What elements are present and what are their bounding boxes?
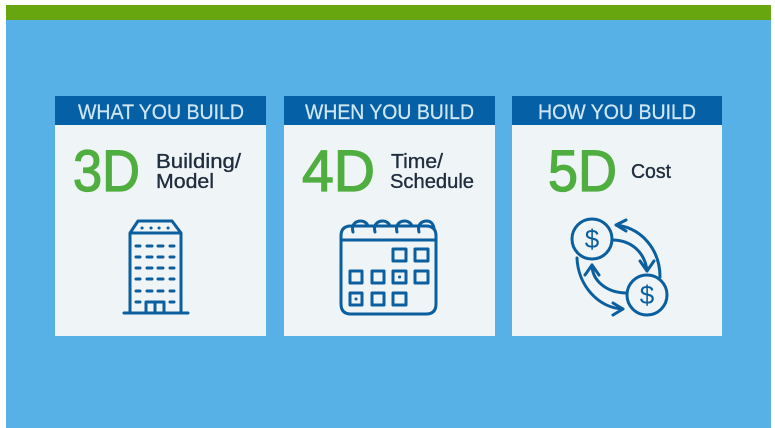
heading: 5D: 5D (548, 139, 617, 204)
label: Building/Model: Building/ (156, 151, 241, 173)
label: Building/Model: Model (156, 171, 214, 193)
icon: money cycle (572, 219, 667, 315)
header: how you build: HOW YOU BUILD (538, 101, 696, 124)
top green bar (6, 5, 771, 20)
header: what you build (55, 96, 266, 125)
header: when you build: WHEN YOU BUILD (305, 101, 474, 124)
panel: 5D (512, 96, 722, 336)
icon: building (124, 221, 188, 313)
label: Time/Schedule: Schedule (390, 171, 474, 193)
dollar signs: $ (585, 224, 600, 254)
label: Time/Schedule: Time/ (391, 151, 443, 173)
label: Cost: Cost (631, 161, 671, 183)
icon: calendar (341, 221, 436, 314)
dollar signs: $ (640, 280, 655, 310)
heading: 4D: 4D (302, 139, 375, 204)
header: when you build (284, 96, 495, 125)
dollar signs (585, 224, 655, 310)
header: what you build: WHAT YOU BUILD (78, 101, 244, 124)
panel: 4D (284, 96, 495, 336)
heading: 3D: 3D (73, 139, 140, 204)
panel: 3D (55, 96, 266, 336)
header: how you build (512, 96, 722, 125)
